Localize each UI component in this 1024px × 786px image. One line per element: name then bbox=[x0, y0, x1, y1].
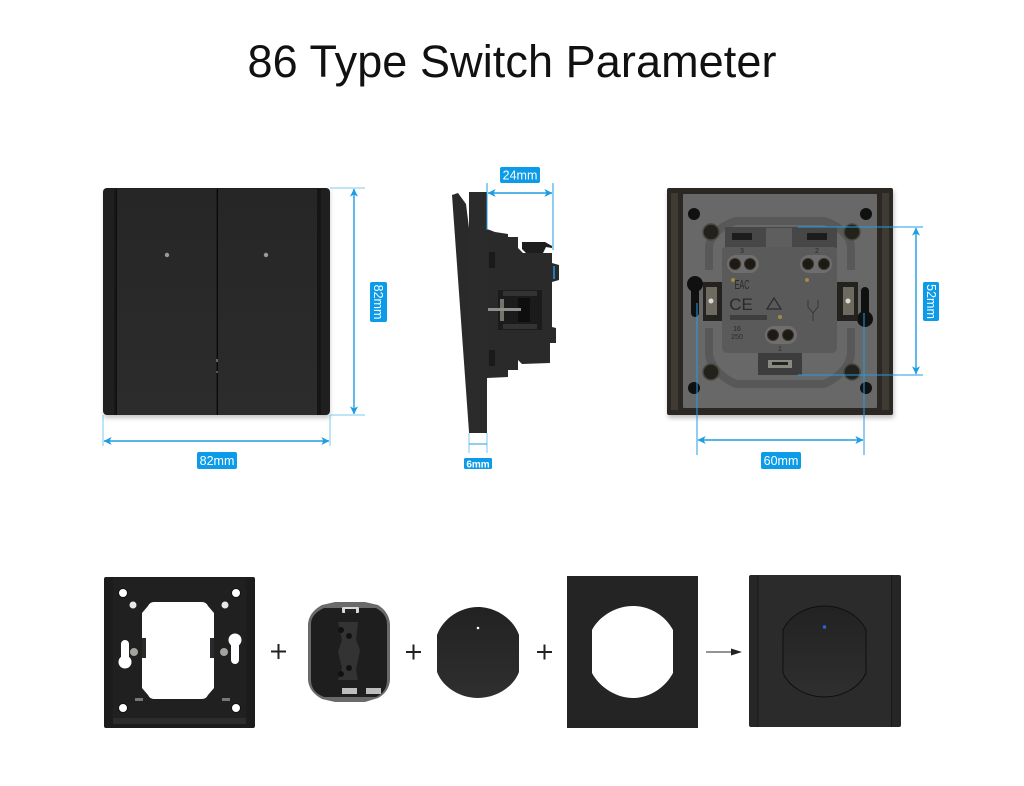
side terminal left bbox=[703, 282, 727, 321]
bottom clips bbox=[342, 688, 357, 694]
shadow bbox=[104, 191, 330, 418]
shadow bbox=[668, 191, 894, 418]
top clip bbox=[342, 607, 359, 613]
module markings: 3 bbox=[740, 248, 744, 255]
plus sign 3 bbox=[537, 644, 552, 660]
grey back plate bbox=[683, 194, 877, 408]
dimension: front width 82mm: 82mm bbox=[200, 454, 234, 468]
assembled rocker disc bbox=[783, 606, 866, 697]
terminal holes bbox=[727, 255, 832, 344]
brown-black frame bbox=[667, 188, 893, 415]
terminal screw bbox=[488, 299, 521, 321]
module markings: 1 bbox=[778, 346, 782, 353]
dimension: mounting height 52mm: 52mm bbox=[924, 284, 938, 319]
side terminal right bbox=[833, 282, 858, 321]
title: 86 Type Switch Parameter bbox=[248, 36, 776, 87]
component: switch module bbox=[308, 602, 390, 702]
panel: front view of switch bbox=[103, 188, 330, 418]
left rocker bbox=[117, 189, 217, 415]
plus sign 1 bbox=[271, 644, 286, 659]
dimension: front height 82mm bbox=[330, 188, 387, 415]
wiring symbol bbox=[808, 300, 818, 321]
top clip bbox=[522, 242, 552, 253]
component: rocker disc bbox=[437, 607, 519, 698]
warning triangle bbox=[767, 298, 781, 309]
bottom connector bbox=[758, 352, 802, 375]
dimension: mounting width 60mm: 60mm bbox=[764, 454, 798, 468]
centre module bbox=[722, 247, 837, 353]
module markings: EAC bbox=[734, 277, 750, 292]
component: cover plate bbox=[567, 576, 698, 728]
dimension: mounting height 52mm bbox=[798, 227, 939, 375]
switch body bbox=[103, 188, 330, 415]
keyhole slots bbox=[687, 276, 873, 327]
dimension: plate thickness 6mm bbox=[464, 433, 492, 470]
raised ring bbox=[709, 221, 851, 384]
brass rivets bbox=[731, 278, 809, 319]
module markings bbox=[729, 248, 819, 353]
dimension: plate thickness 6mm: 6mm bbox=[466, 460, 490, 470]
dimension: front width 82mm bbox=[103, 415, 330, 469]
top connector bbox=[725, 227, 837, 248]
terminal window bbox=[498, 290, 542, 330]
component: assembled switch bbox=[749, 575, 901, 727]
face plate bbox=[469, 192, 487, 433]
rocker wedge bbox=[452, 193, 469, 432]
indicator light right bbox=[264, 253, 268, 257]
opening tabs bbox=[142, 638, 146, 658]
keyholes bbox=[118, 634, 242, 668]
component: mounting frame bbox=[104, 577, 255, 728]
plus sign 2 bbox=[406, 644, 421, 660]
right rocker bbox=[218, 189, 317, 415]
module markings: CE bbox=[729, 295, 753, 314]
dimension: depth 24mm: 24mm bbox=[503, 168, 537, 182]
central opening bbox=[142, 602, 214, 699]
arrow bbox=[706, 648, 742, 656]
mounting holes bbox=[688, 208, 872, 394]
dimension: mounting width 60mm bbox=[697, 303, 864, 469]
screws bbox=[703, 224, 860, 380]
module markings: 250 bbox=[731, 334, 743, 341]
panel: back view of switch bbox=[667, 188, 894, 418]
module markings: 2 bbox=[815, 248, 819, 255]
dimension: depth 24mm bbox=[487, 167, 553, 250]
blue indicator light bbox=[823, 625, 826, 629]
corner holes bbox=[118, 588, 240, 712]
centre spine bbox=[338, 622, 360, 680]
panel: side view of switch bbox=[452, 192, 559, 433]
module markings: 16 bbox=[733, 326, 741, 333]
indicator light left bbox=[165, 253, 169, 257]
label strip bbox=[730, 315, 767, 320]
dimension: front height 82mm: 82mm bbox=[371, 285, 385, 319]
small clip openings bbox=[130, 602, 136, 608]
rear housing bbox=[487, 229, 559, 378]
screws bbox=[130, 648, 138, 656]
